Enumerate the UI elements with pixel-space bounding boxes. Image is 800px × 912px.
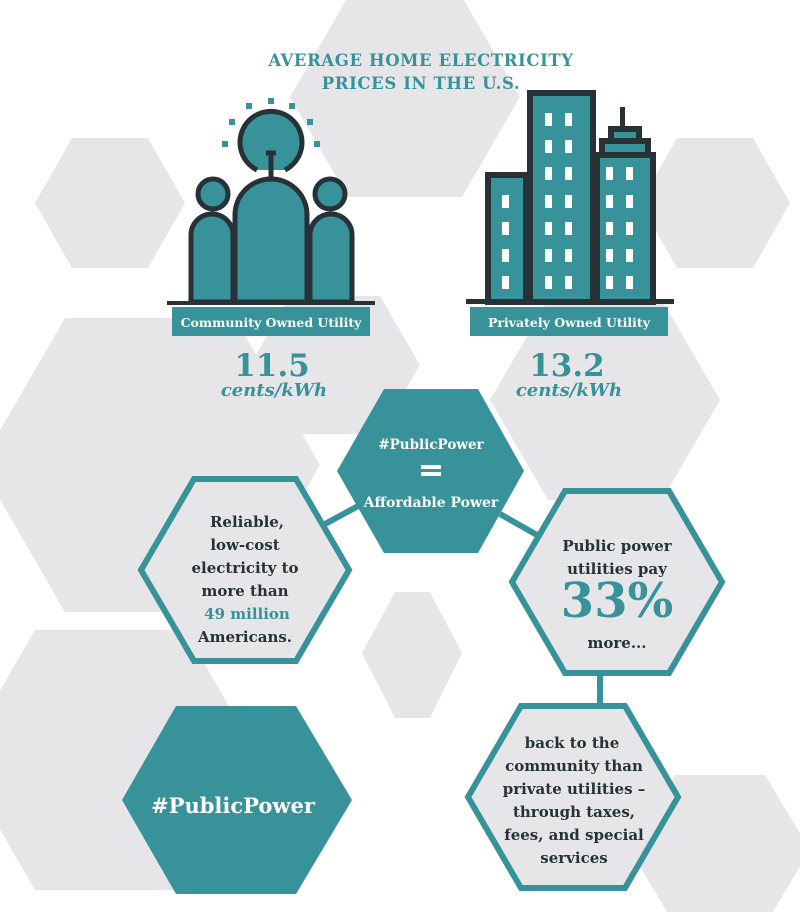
hex: reliable low-cost electricity: low-cost (210, 536, 280, 554)
hex: reliable low-cost electricity (141, 479, 349, 661)
hex: 33% more: utilities pay (567, 560, 668, 578)
price: private (516, 348, 622, 401)
label: privately owned utility (470, 307, 668, 336)
hex: back to the community: through taxes, (513, 803, 635, 821)
hex: 33% more: more... (588, 634, 646, 652)
title: AVERAGE HOME ELECTRICITY (267, 51, 574, 70)
hex: 33% more: 33% (561, 573, 673, 629)
price: community (221, 348, 327, 401)
price: community: 11.5 (234, 348, 310, 384)
title (267, 51, 574, 93)
hex: #PublicPower = Affordable Power: Affordable Power (363, 495, 499, 511)
hex: back to the community: community than (505, 757, 643, 775)
label: privately owned utility: Privately Owned Utility (488, 315, 651, 330)
hex: back to the community: fees, and special (504, 826, 644, 844)
hex: 33% more: Public power (562, 537, 673, 555)
connectors (325, 505, 600, 706)
label: community owned utility (172, 307, 370, 336)
icon: community people with lightbulb (167, 98, 375, 305)
price: community: cents/kWh (221, 380, 327, 401)
hex: #PublicPower = Affordable Power: #PublicPower (378, 437, 485, 453)
hex: #PublicPower: #PublicPower (151, 793, 316, 818)
title: PRICES IN THE U.S. (322, 74, 520, 93)
hex: back to the community: private utilities – (503, 780, 645, 798)
hex: reliable low-cost electricity: electricity to (191, 559, 299, 577)
hex: #PublicPower = Affordable Power (337, 389, 524, 553)
price: private: cents/kWh (516, 380, 622, 401)
hex: reliable low-cost electricity: 49 million (204, 605, 290, 623)
hex: 33% more (512, 491, 722, 673)
hex: reliable low-cost electricity: Reliable, (210, 513, 284, 531)
label: community owned utility: Community Owned Utility (181, 315, 362, 330)
price: private: 13.2 (529, 348, 605, 384)
icon: city buildings (466, 93, 674, 304)
hex: reliable low-cost electricity: more than (201, 582, 289, 600)
hex: back to the community: services (540, 849, 608, 867)
hex: back to the community: back to the (525, 734, 619, 752)
hex: back to the community (468, 706, 678, 888)
hex: reliable low-cost electricity: Americans. (197, 628, 292, 646)
hex: #PublicPower (122, 706, 352, 894)
